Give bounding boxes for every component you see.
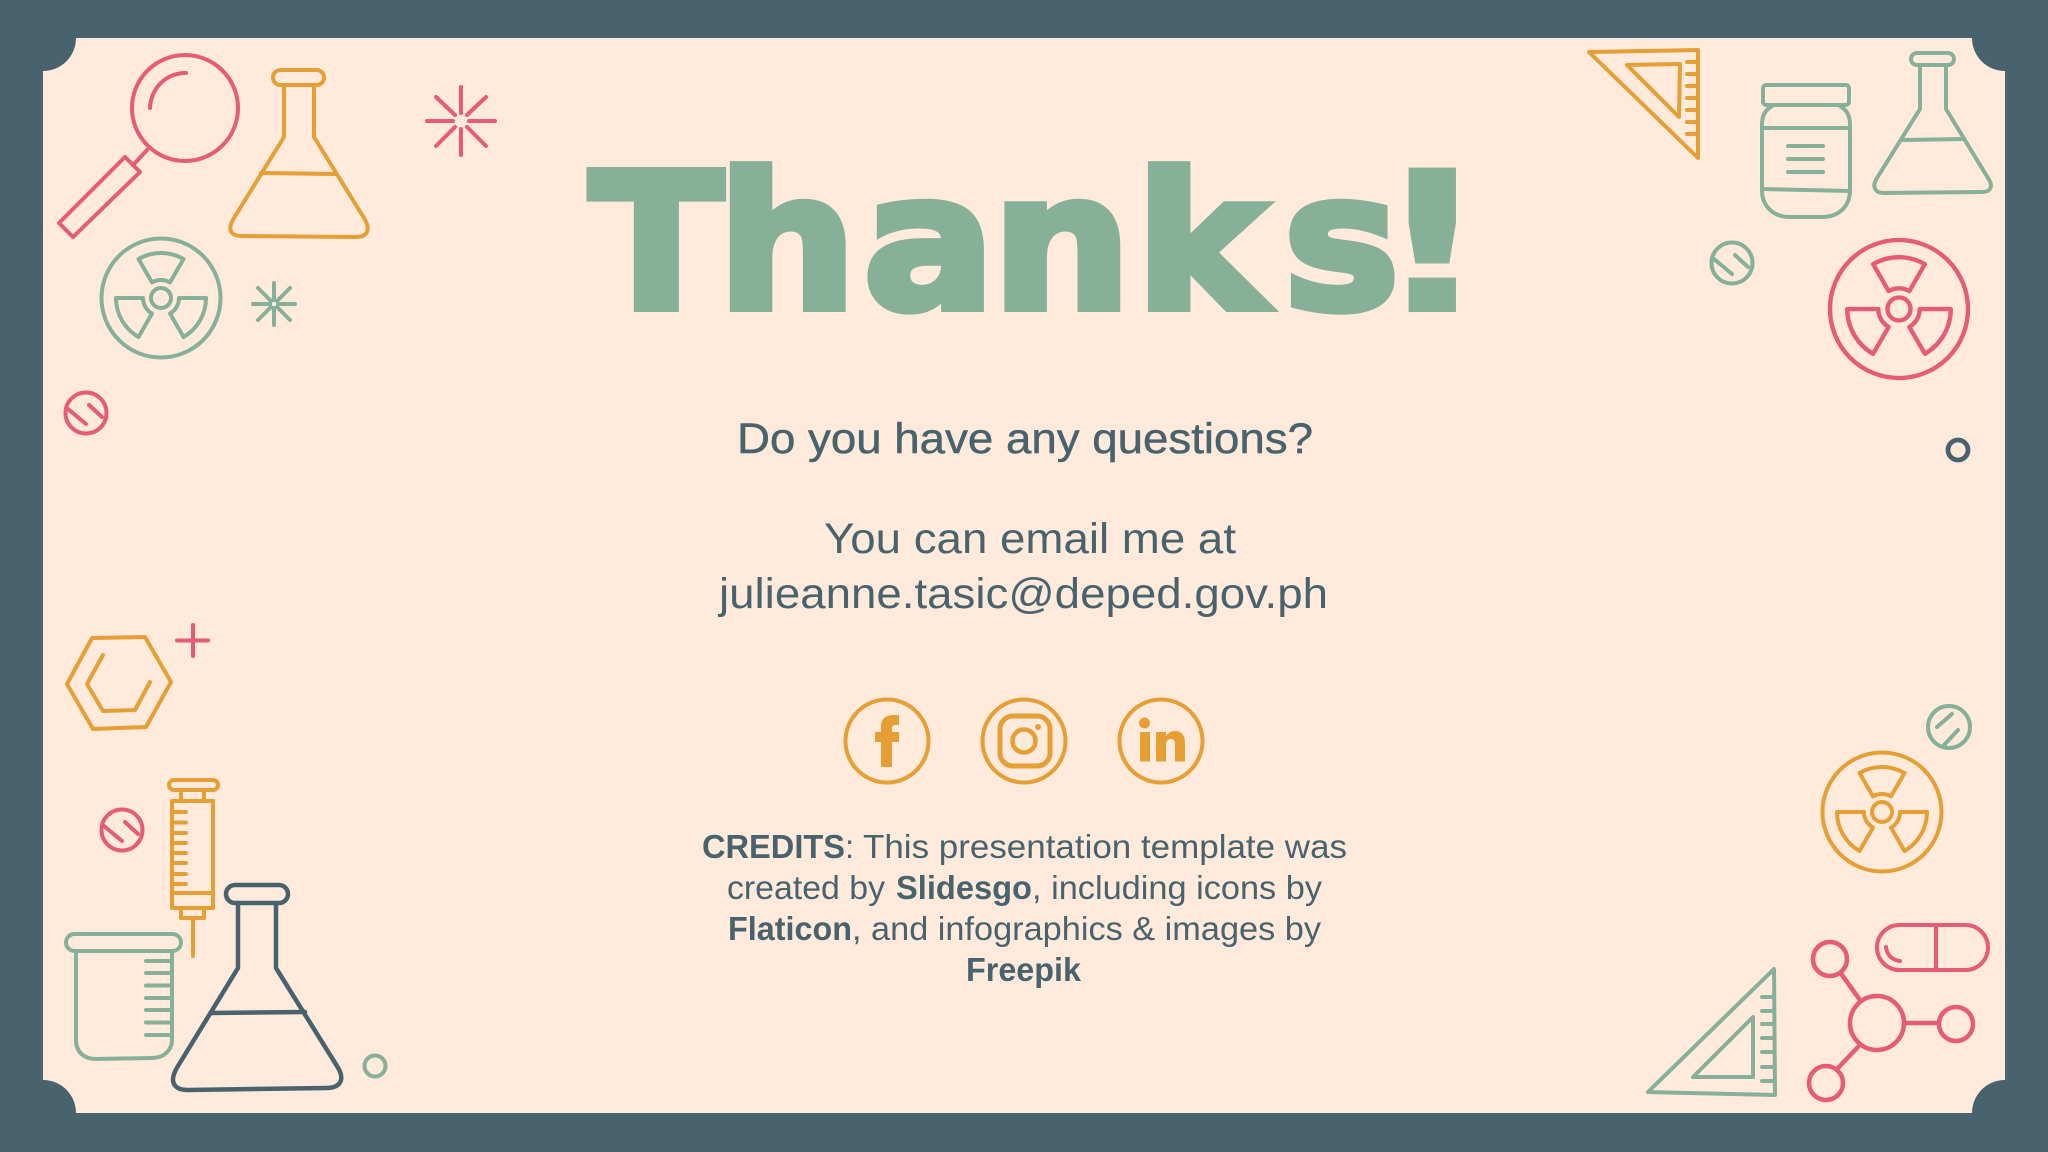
icon: syringe [169,780,218,956]
credits text block: Flaticon [728,910,852,947]
icon: green sparkle [253,283,295,325]
icon: beaker [66,934,181,1059]
icon: pink pill mark top left [66,392,106,434]
icon: orange set square [1589,50,1698,158]
icon: green radiation [102,238,220,358]
credits text block: This presentation template was [863,828,1347,865]
icon: hexagon molecule [67,637,171,729]
email text block: You can email me at [824,515,1236,563]
icon: dark ring [1948,440,1968,460]
icon: dark flask [173,885,341,1090]
icon: pink pill mark lower left [102,810,142,850]
icon: facebook [846,700,928,782]
icon: green ring [364,1056,386,1076]
icon: orange flask [230,70,368,237]
credits text block: Slidesgo [896,869,1032,906]
icon: magnifying glass [59,55,238,237]
icon: green set square [1648,969,1775,1095]
credits text block: : [845,828,854,865]
title: ! [1371,129,1494,359]
email text block [717,515,1328,618]
icon: green flask [1874,53,1991,193]
icon: capsule [1877,925,1988,970]
icon: jar [1762,85,1850,217]
social icons [846,700,1202,782]
icon: green pill mark lower right [1928,706,1970,748]
question heading: Do you have any questions? [737,415,1313,463]
icon: orange radiation [1822,752,1942,872]
credits text block: created by [727,869,886,906]
icon: molecule [1809,942,1973,1100]
credits text block: , including icons by [1032,869,1323,906]
credits text block [702,828,1347,988]
email text block: julieanne.tasic@deped.gov.ph [717,570,1328,618]
icon: pink plus [177,625,208,656]
credits text block: CREDITS [702,828,845,865]
credits text block: , and infographics & images by [852,910,1322,947]
icon: linkedin [1120,700,1202,782]
icon: instagram [982,700,1066,782]
icon: green pill mark top right [1712,242,1752,284]
credits text block: Freepik [966,951,1082,988]
icon: pink sparkle [427,87,495,155]
title: Thanks [590,135,1400,353]
icon: red radiation [1830,240,1968,378]
